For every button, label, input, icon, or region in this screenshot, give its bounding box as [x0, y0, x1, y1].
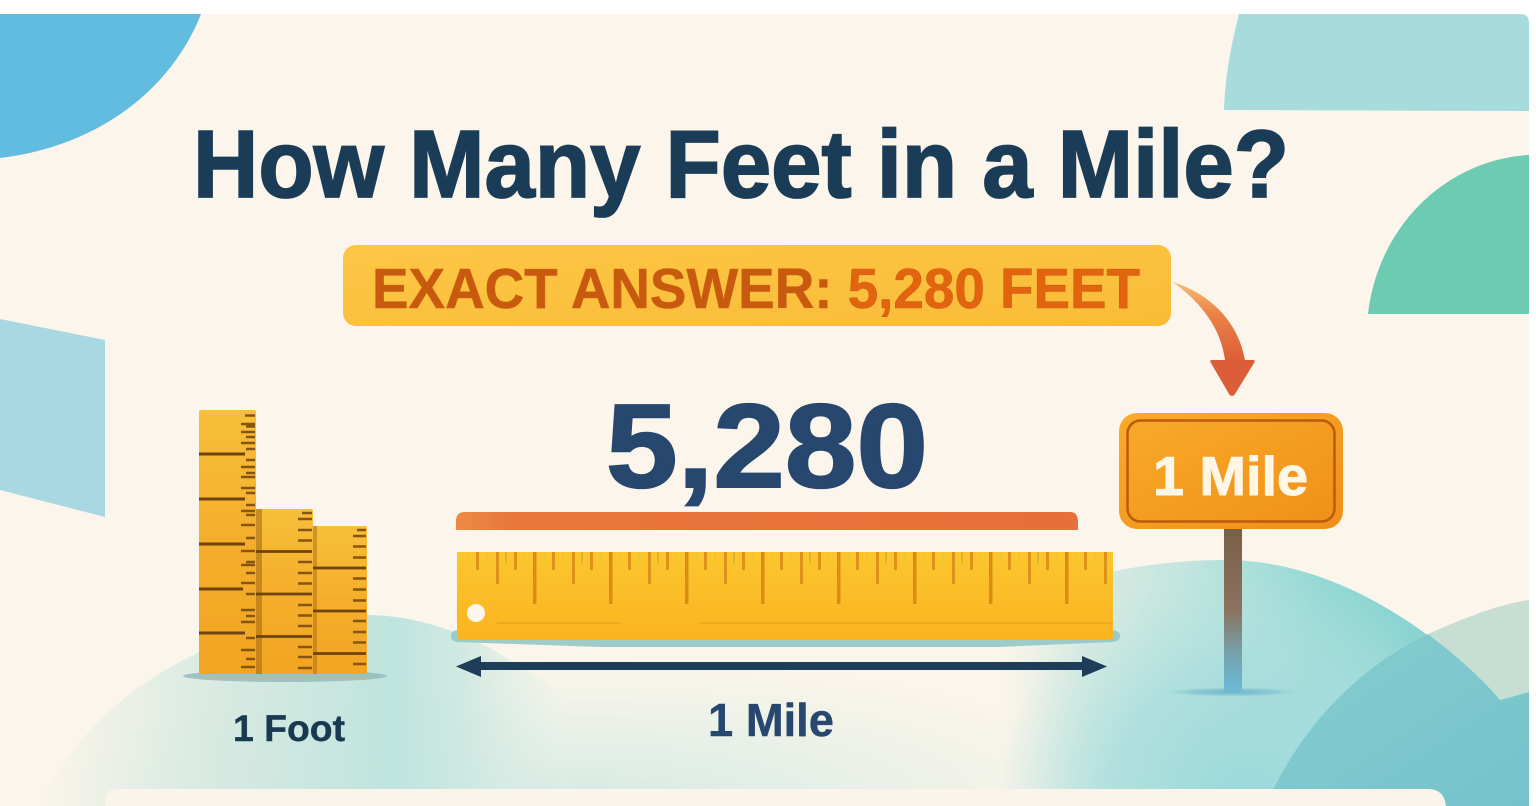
label: 1 foot: 1 Foot: [233, 708, 345, 749]
bar: orange span: [456, 512, 1078, 530]
hill: right: [1020, 560, 1500, 789]
hill: pale back right: [1428, 600, 1529, 700]
post shadow: [1163, 687, 1303, 697]
icon: stacked foot rulers: [183, 410, 387, 682]
icon: long ruler: [451, 552, 1120, 647]
label: 1 mile: 1 Mile: [708, 694, 834, 746]
ground pool: lower right: [1023, 603, 1396, 789]
icon: road sign: 1 Mile: [1153, 445, 1308, 507]
decorative shape: green quarter circle right: [1368, 155, 1529, 314]
ruler: medium: [256, 509, 313, 674]
icon: road sign: [1119, 413, 1343, 697]
decorative shape: pale teal block top right: [1224, 14, 1529, 111]
decorative shape: blue quarter circle top left: [0, 14, 201, 158]
callout: exact answer: EXACT ANSWER: 5,280 FEET: [372, 257, 1140, 321]
hill: dark front right: [1265, 634, 1529, 806]
arrow: callout to sign: [1173, 282, 1255, 396]
arrow: 1 mile span: [456, 656, 1107, 677]
post: [1224, 529, 1242, 692]
title: How Many Feet in a Mile?: [193, 111, 1289, 218]
decorative shape: pale blue block left: [0, 319, 105, 517]
shadow: [183, 670, 387, 682]
ground wash: [475, 693, 1008, 789]
ruler: short: [313, 526, 367, 674]
bottom panel: [105, 789, 1446, 806]
ruler: tall: [199, 410, 256, 674]
number: 5,280: 5,280: [606, 380, 928, 513]
sign board: [1119, 413, 1343, 529]
hill: left: [81, 615, 537, 806]
